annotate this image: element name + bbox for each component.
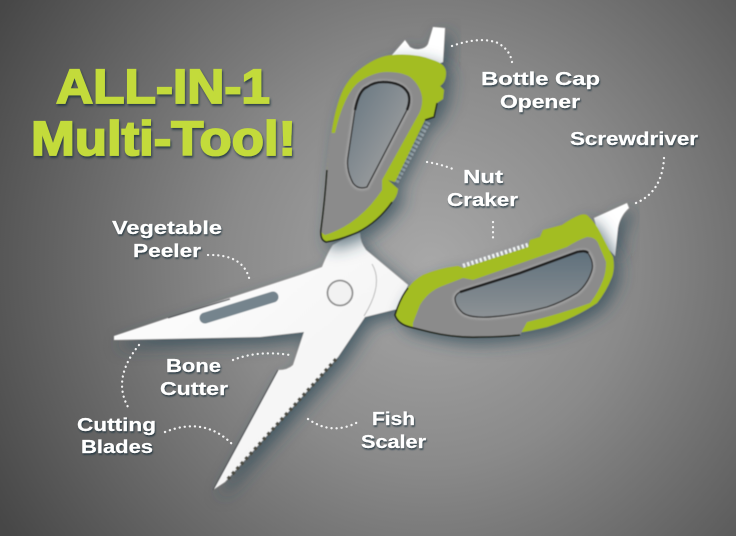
serrated edge (226, 359, 336, 481)
leader: screwdriver (636, 158, 664, 203)
blade dark edges (168, 299, 278, 490)
leader: nut cracker upper (427, 162, 453, 169)
upper handle serration (396, 122, 428, 182)
label: bone cutter: Cutter (160, 378, 228, 399)
label: nut cracker: Craker (447, 189, 518, 210)
label: vegetable peeler (112, 217, 222, 261)
lower handle (395, 214, 614, 337)
label: bottle cap opener (481, 68, 600, 112)
label: cutting blades: Cutting (77, 414, 156, 435)
label: vegetable peeler: Peeler (133, 240, 201, 261)
upper handle (321, 55, 446, 242)
blades (114, 27, 629, 490)
leader: fish scaler (308, 419, 358, 428)
label: fish scaler: Scaler (361, 431, 426, 452)
upper handle green shell (321, 55, 446, 242)
label: nut cracker: Nut (463, 166, 503, 187)
blade crease (364, 264, 376, 316)
label: cutting blades: Blades (81, 436, 153, 457)
lower handle hole dark rim (460, 251, 588, 292)
label: bottle cap opener: Bottle Cap (481, 68, 600, 89)
main blade body (114, 233, 408, 490)
label: bottle cap opener: Opener (500, 91, 580, 112)
leader: vegetable peeler (208, 255, 250, 282)
label: fish scaler: Fish (372, 408, 415, 429)
screwdriver tip (594, 203, 629, 256)
bottle opener tip (392, 27, 445, 72)
leader: nut cracker lower (492, 222, 494, 242)
leader: cutting blades upper (122, 345, 139, 407)
leader: cutting blades lower (165, 426, 233, 445)
upper handle grey grip (321, 72, 422, 235)
label: cutting blades (77, 414, 156, 457)
title (31, 61, 296, 166)
title: ALL-IN-1 (56, 61, 270, 114)
label: bone cutter (160, 355, 228, 399)
lower handle outline (395, 288, 520, 337)
lower handle hole (455, 251, 592, 317)
label: screwdriver: Screwdriver (570, 128, 698, 149)
lower handle green shell (395, 214, 614, 337)
leader: bottle cap opener (452, 40, 512, 62)
peeler slot (205, 297, 273, 318)
upper handle hole bevel (348, 82, 409, 188)
lower handle grey grip (413, 237, 606, 337)
upper handle outline (321, 103, 437, 242)
title: Multi-Tool! (31, 113, 296, 166)
upper handle hole (348, 82, 409, 188)
label: fish scaler (361, 408, 426, 452)
scissors illustration (114, 27, 629, 490)
label: vegetable peeler: Vegetable (112, 217, 222, 238)
label: nut cracker (447, 166, 518, 210)
label: bone cutter: Bone (166, 355, 221, 376)
lower handle hole bevel (455, 251, 592, 317)
leader: bone cutter (233, 353, 290, 360)
upper handle hole dark rim (355, 82, 409, 110)
lower handle serration (463, 245, 528, 266)
pivot screw (328, 280, 352, 306)
